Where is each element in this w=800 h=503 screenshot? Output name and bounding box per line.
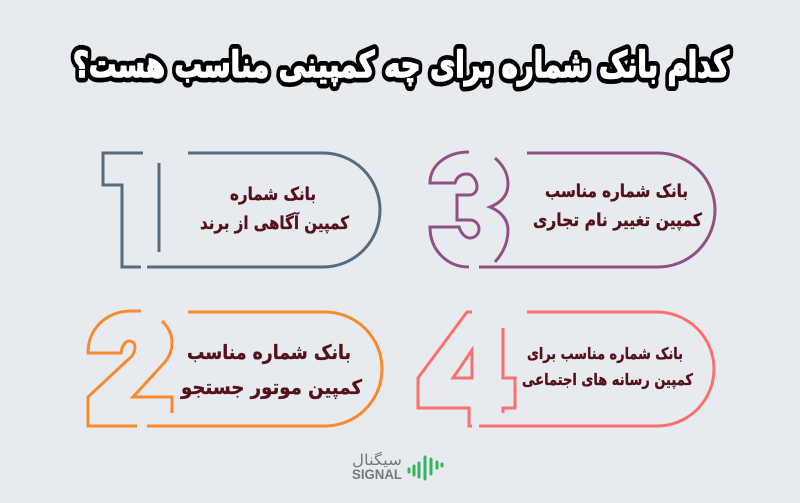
panel: number 1 awareness campaign: [103, 153, 380, 267]
numeral 1 outline: [103, 153, 380, 267]
logo wordmark: SIGNAL: [352, 466, 402, 482]
text: panel 1: [200, 184, 349, 234]
text: panel 4: کمپین رسانه های اجتماعی: [522, 370, 694, 390]
numeral 3 outline: [430, 152, 715, 267]
text: panel 3: [533, 181, 702, 231]
logo wordmark: سیگنال: [352, 451, 402, 469]
panel: number 4 social media campaign: [418, 312, 714, 426]
text: panel 4: بانک شماره مناسب برای: [527, 344, 683, 363]
text: panel 1: بانک شماره: [230, 184, 316, 205]
text: panel 3: کمپین تغییر نام تجاری: [533, 210, 702, 231]
panel: number 3 rebranding campaign: [430, 152, 715, 267]
text: panel 2: [180, 340, 362, 400]
numeral 2 outline: [88, 311, 382, 426]
numeral 4 outline: [418, 312, 714, 426]
logo: Signal: [352, 451, 442, 482]
icon: green sound wave: [409, 457, 442, 479]
logo wordmark: [352, 451, 402, 482]
text: panel 2: بانک شماره مناسب: [187, 340, 351, 364]
text: panel 1: کمپین آگاهی از برند: [200, 211, 349, 234]
panel: number 2 search engine campaign: [88, 311, 382, 426]
text: panel 4: [522, 344, 694, 390]
text: panel 3: بانک شماره مناسب: [545, 181, 688, 202]
text: panel 2: کمپین موتور جستجو: [180, 375, 362, 400]
